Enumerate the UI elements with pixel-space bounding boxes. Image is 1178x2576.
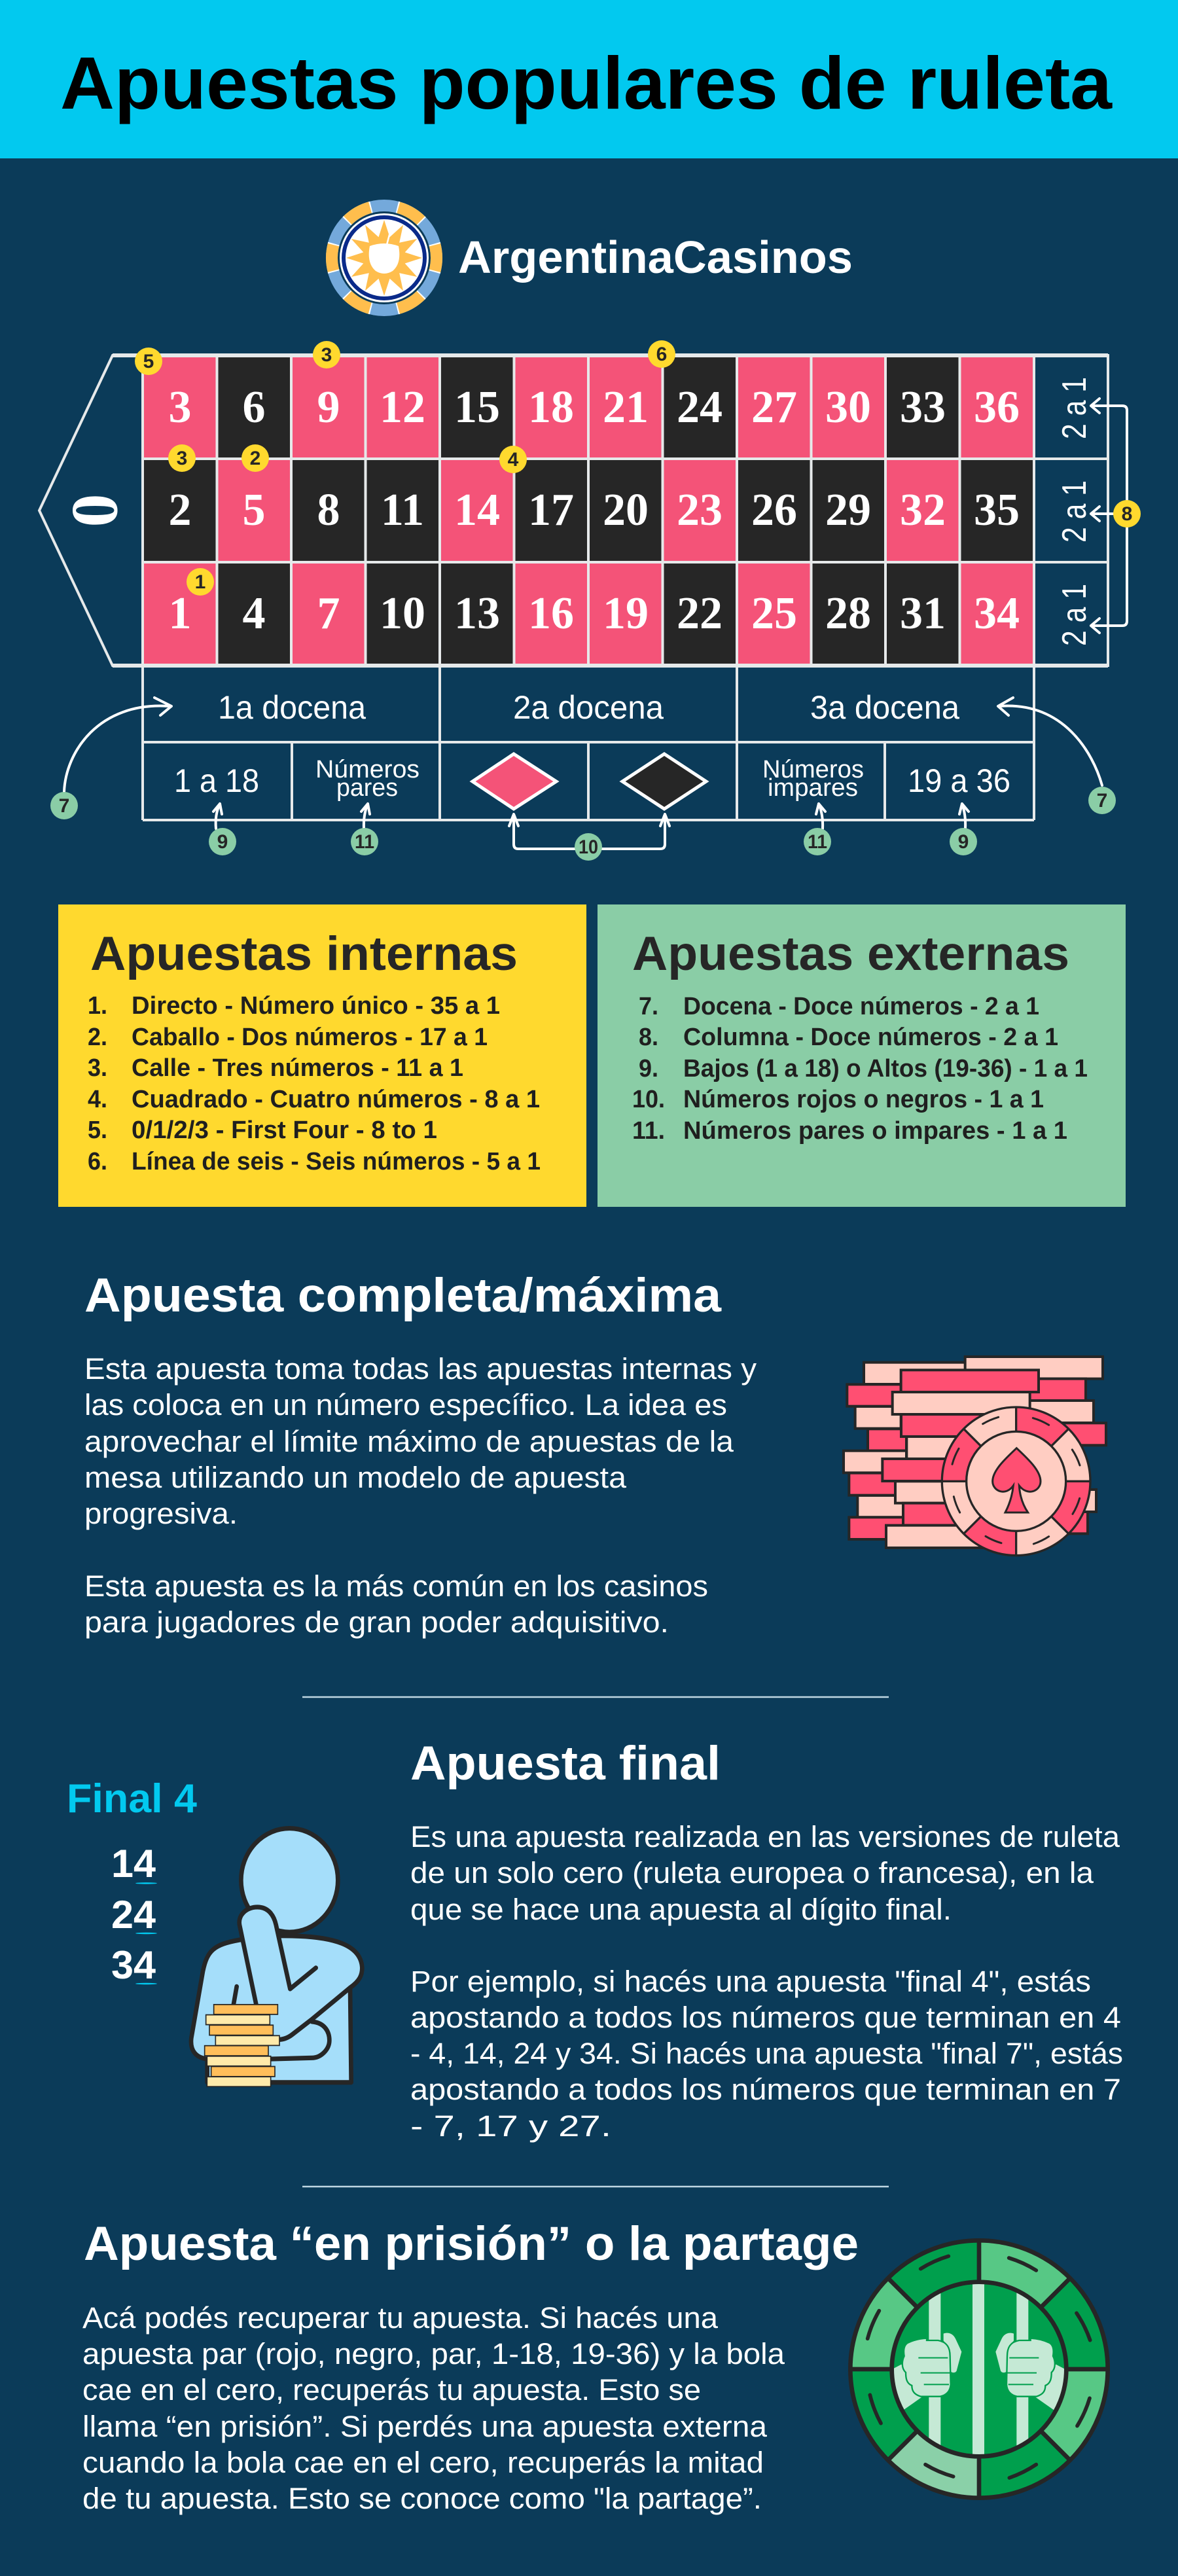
badges: inside bet numbers: 8	[1122, 503, 1132, 525]
numbers row 3: 19	[603, 588, 649, 639]
numbers row 3: 1	[169, 588, 191, 639]
text block: en prisión	[82, 2301, 785, 2515]
zero cell label: 0	[58, 493, 132, 528]
numbers row 3: 13	[454, 588, 500, 639]
text block: apuesta completa: para jugadores de gran poder adquisitivo.	[84, 1605, 669, 1639]
column payouts 2 a 1: 2 a 1	[1056, 480, 1094, 543]
list: outside bets: 10.	[632, 1086, 665, 1113]
numbers row 2: 32	[900, 485, 946, 535]
roulette table	[39, 355, 1108, 820]
dozen labels	[218, 689, 959, 726]
numbers row 3: 34	[974, 588, 1020, 639]
numbers row 1: 24	[677, 382, 723, 433]
outside bet labels	[174, 756, 1010, 802]
numbers row 1: 27	[751, 382, 797, 433]
icon: red diamond	[473, 754, 556, 809]
list: outside bets: Columna - Doce números - 2 a 1	[683, 1024, 1058, 1051]
icon: green chip with prison bars	[850, 2240, 1108, 2498]
badges: inside bet numbers	[135, 340, 1141, 596]
text block: en prisión: llama “en prisión”. Si perdés una apuesta externa	[82, 2410, 768, 2443]
numbers row 1	[169, 382, 1020, 433]
list: outside bets: Números rojos o negros - 1 a 1	[683, 1086, 1044, 1113]
numbers row 2: 8	[317, 485, 340, 535]
text block: apuesta final: de un solo cero (ruleta europea o francesa), en la	[410, 1856, 1094, 1889]
list: inside bets: 4.	[88, 1086, 107, 1113]
text block: apuesta final: - 7, 17 y 27.	[410, 2109, 611, 2143]
text block: apuesta completa: Esta apuesta es la más común en los casinos	[84, 1569, 708, 1603]
final 4 numbers: 14	[111, 1842, 156, 1886]
icon: black diamond	[622, 754, 706, 809]
text block: en prisión: Acá podés recuperar tu apuesta. Si hacés una	[82, 2301, 719, 2334]
badges: outside bet numbers	[50, 787, 1116, 861]
panel: apuestas externas	[598, 904, 1126, 1207]
section: apuesta final	[67, 1737, 1123, 2143]
list: inside bets: Línea de seis - Seis números - 5 a 1	[132, 1148, 541, 1175]
final 4 numbers: 24	[111, 1893, 156, 1937]
list: outside bets: Docena - Doce números - 2 a 1	[683, 993, 1039, 1020]
numbers row 1: 21	[603, 382, 649, 433]
text block: apuesta final: apostando a todos los números que terminan en 4	[410, 2001, 1121, 2034]
list: inside bets: 1.	[88, 992, 107, 1020]
badges: outside bet numbers: 11	[355, 831, 374, 853]
heading: apuestas externas: Apuestas externas	[632, 927, 1069, 980]
numbers row 1: 15	[454, 382, 500, 433]
text block: apuesta final: apostando a todos los números que terminan en 7	[410, 2073, 1121, 2106]
text block: apuesta final: Es una apuesta realizada en las versiones de ruleta	[410, 1820, 1120, 1853]
list: outside bets: Bajos (1 a 18) o Altos (19-36) - 1 a 1	[683, 1055, 1088, 1082]
arrow: left dozen	[64, 698, 171, 792]
dozen labels: 2a docena	[513, 689, 664, 726]
numbers row 2: 2	[169, 485, 191, 535]
list: outside bets	[632, 993, 1088, 1145]
outside bet labels: 19 a 36	[908, 762, 1010, 799]
numbers row 1: 6	[242, 382, 266, 433]
text block: apuesta completa: mesa utilizando un modelo de apuesta	[84, 1461, 627, 1494]
numbers row 2: 11	[381, 485, 424, 535]
panel: apuestas internas	[58, 904, 586, 1207]
badges: inside bet numbers: 4	[508, 449, 519, 471]
dozen labels: 3a docena	[810, 689, 959, 726]
numbers row 2: 5	[242, 485, 266, 535]
section: apuesta en prisión	[82, 2217, 1108, 2515]
dozen labels: 1a docena	[218, 689, 366, 726]
heading: apuestas internas: Apuestas internas	[90, 927, 518, 980]
numbers row 3: 28	[825, 588, 871, 639]
divider	[302, 1696, 889, 1698]
text block: apuesta final	[410, 1820, 1123, 2143]
list: inside bets: Directo - Número único - 35 a 1	[132, 992, 500, 1020]
list: inside bets: 5.	[88, 1117, 107, 1144]
arrow: right dozen	[998, 698, 1102, 785]
column payouts 2 a 1: 2 a 1	[1056, 584, 1094, 646]
numbers row 3	[169, 588, 1020, 639]
list: outside bets: 7.	[639, 993, 658, 1020]
text block: apuesta completa	[84, 1352, 757, 1639]
icon: sun and mate chip	[319, 193, 449, 323]
badges: outside bet numbers: 11	[808, 831, 827, 853]
table grid lines	[39, 355, 1108, 820]
text block: en prisión: cae en el cero, recuperás tu apuesta. Esto se	[82, 2373, 701, 2406]
numbers row 3: 31	[900, 588, 946, 639]
numbers row 1: 33	[900, 382, 946, 433]
text block: en prisión: cuando la bola cae en el cero, recuperás la mitad	[82, 2446, 764, 2479]
list: inside bets: Calle - Tres números - 11 a 1	[132, 1054, 463, 1082]
numbers row 2: 17	[528, 485, 574, 535]
text block: en prisión: apuesta par (rojo, negro, par, 1-18, 19-36) y la bola	[82, 2337, 785, 2370]
numbers row 1: 3	[169, 382, 191, 433]
badges: inside bet numbers: 3	[177, 448, 187, 469]
badges: outside bet numbers: 7	[59, 795, 69, 817]
numbers row 1: 12	[380, 382, 425, 433]
numbers row 2: 29	[825, 485, 871, 535]
icon: poker chip stacks	[844, 1357, 1106, 1556]
final 4 numbers: 34	[111, 1943, 156, 1987]
numbers row 1: 30	[825, 382, 871, 433]
list: inside bets: Cuadrado - Cuatro números - 8 a 1	[132, 1086, 540, 1113]
text block: en prisión: de tu apuesta. Esto se conoce como "la partage”.	[82, 2482, 762, 2515]
numbers row 3: 7	[317, 588, 340, 639]
arrow: colour bracket	[509, 814, 669, 849]
text block: apuesta completa: Esta apuesta toma todas las apuestas internas y	[84, 1352, 757, 1386]
arrows: small outside bet arrows	[213, 804, 969, 829]
outside bet labels: Números	[315, 756, 419, 783]
badges: outside bet numbers: 7	[1097, 790, 1107, 812]
header banner	[0, 0, 1178, 158]
outside bet labels: 1 a 18	[174, 762, 259, 799]
numbers row 3: 22	[677, 588, 723, 639]
final 4 numbers	[111, 1842, 157, 1987]
list: inside bets: 3.	[88, 1054, 107, 1082]
list: outside bets: 9.	[639, 1055, 658, 1082]
text block: apuesta completa: las coloca en un número específico. La idea es	[84, 1388, 727, 1422]
text block: apuesta completa: progresiva.	[84, 1497, 238, 1530]
title: Apuestas populares de ruleta	[60, 42, 1113, 124]
logo wordmark: ArgentinaCasinos	[458, 232, 853, 283]
heading: apuesta completa/máxima: Apuesta completa/máxima	[84, 1269, 722, 1322]
text block: apuesta final: Por ejemplo, si hacés una apuesta "final 4", estás	[410, 1965, 1091, 1998]
numbers row 3: 16	[528, 588, 574, 639]
numbers row 3: 4	[242, 588, 266, 639]
badges: outside bet numbers: 9	[958, 831, 969, 853]
icon: thinking person with chips	[191, 1829, 362, 2086]
numbers row 2: 26	[751, 485, 797, 535]
badges: outside bet numbers: 9	[217, 831, 228, 853]
list: outside bets: 8.	[639, 1024, 658, 1051]
number cells	[143, 355, 1034, 666]
section: apuesta completa/máxima	[84, 1269, 1106, 1639]
logo: ArgentinaCasinos	[319, 193, 853, 323]
list: outside bets: 11.	[632, 1117, 665, 1145]
numbers row 2: 14	[454, 485, 500, 535]
outside bet labels: Números	[762, 756, 864, 783]
outside bet labels: pares	[336, 774, 398, 802]
list: outside bets: Números pares o impares - 1 a 1	[683, 1117, 1067, 1145]
text block: apuesta final: que se hace una apuesta al dígito final.	[410, 1893, 952, 1926]
numbers row 1: 18	[528, 382, 574, 433]
numbers row 2: 20	[603, 485, 649, 535]
numbers row 1: 36	[974, 382, 1020, 433]
badges: inside bet numbers: 5	[143, 351, 154, 372]
heading: apuesta en prisión: Apuesta “en prisión” o la partage	[84, 2217, 859, 2270]
arrows: column bracket	[1091, 399, 1127, 633]
numbers row 2: 23	[677, 485, 723, 535]
numbers row 1: 9	[317, 382, 340, 433]
numbers row 3: 10	[380, 588, 425, 639]
numbers row 2: 35	[974, 485, 1020, 535]
badges: inside bet numbers: 6	[656, 344, 667, 365]
column payouts 2 a 1: 2 a 1	[1056, 377, 1094, 439]
badges: inside bet numbers: 1	[195, 571, 205, 593]
badges: outside bet numbers: 10	[579, 836, 598, 858]
text block: apuesta final: - 4, 14, 24 y 34. Si hacés una apuesta "final 7", estás	[410, 2037, 1123, 2070]
numbers row 3: 25	[751, 588, 797, 639]
numbers row 2	[169, 485, 1020, 535]
badges: inside bet numbers: 3	[321, 344, 332, 366]
divider	[302, 2186, 889, 2187]
column payouts 2 a 1	[1056, 377, 1094, 646]
list: inside bets: 0/1/2/3 - First Four - 8 to 1	[132, 1117, 437, 1144]
list: inside bets: 6.	[88, 1148, 107, 1175]
text block: apuesta completa: aprovechar el límite máximo de apuestas de la	[84, 1425, 734, 1458]
outside bet labels: impares	[768, 774, 858, 802]
final 4 label: Final 4	[67, 1776, 198, 1821]
list: inside bets: 2.	[88, 1024, 107, 1051]
heading: apuesta final: Apuesta final	[410, 1737, 721, 1790]
list: inside bets	[88, 992, 541, 1175]
badges: inside bet numbers: 2	[250, 448, 260, 469]
list: inside bets: Caballo - Dos números - 17 a 1	[132, 1024, 488, 1051]
